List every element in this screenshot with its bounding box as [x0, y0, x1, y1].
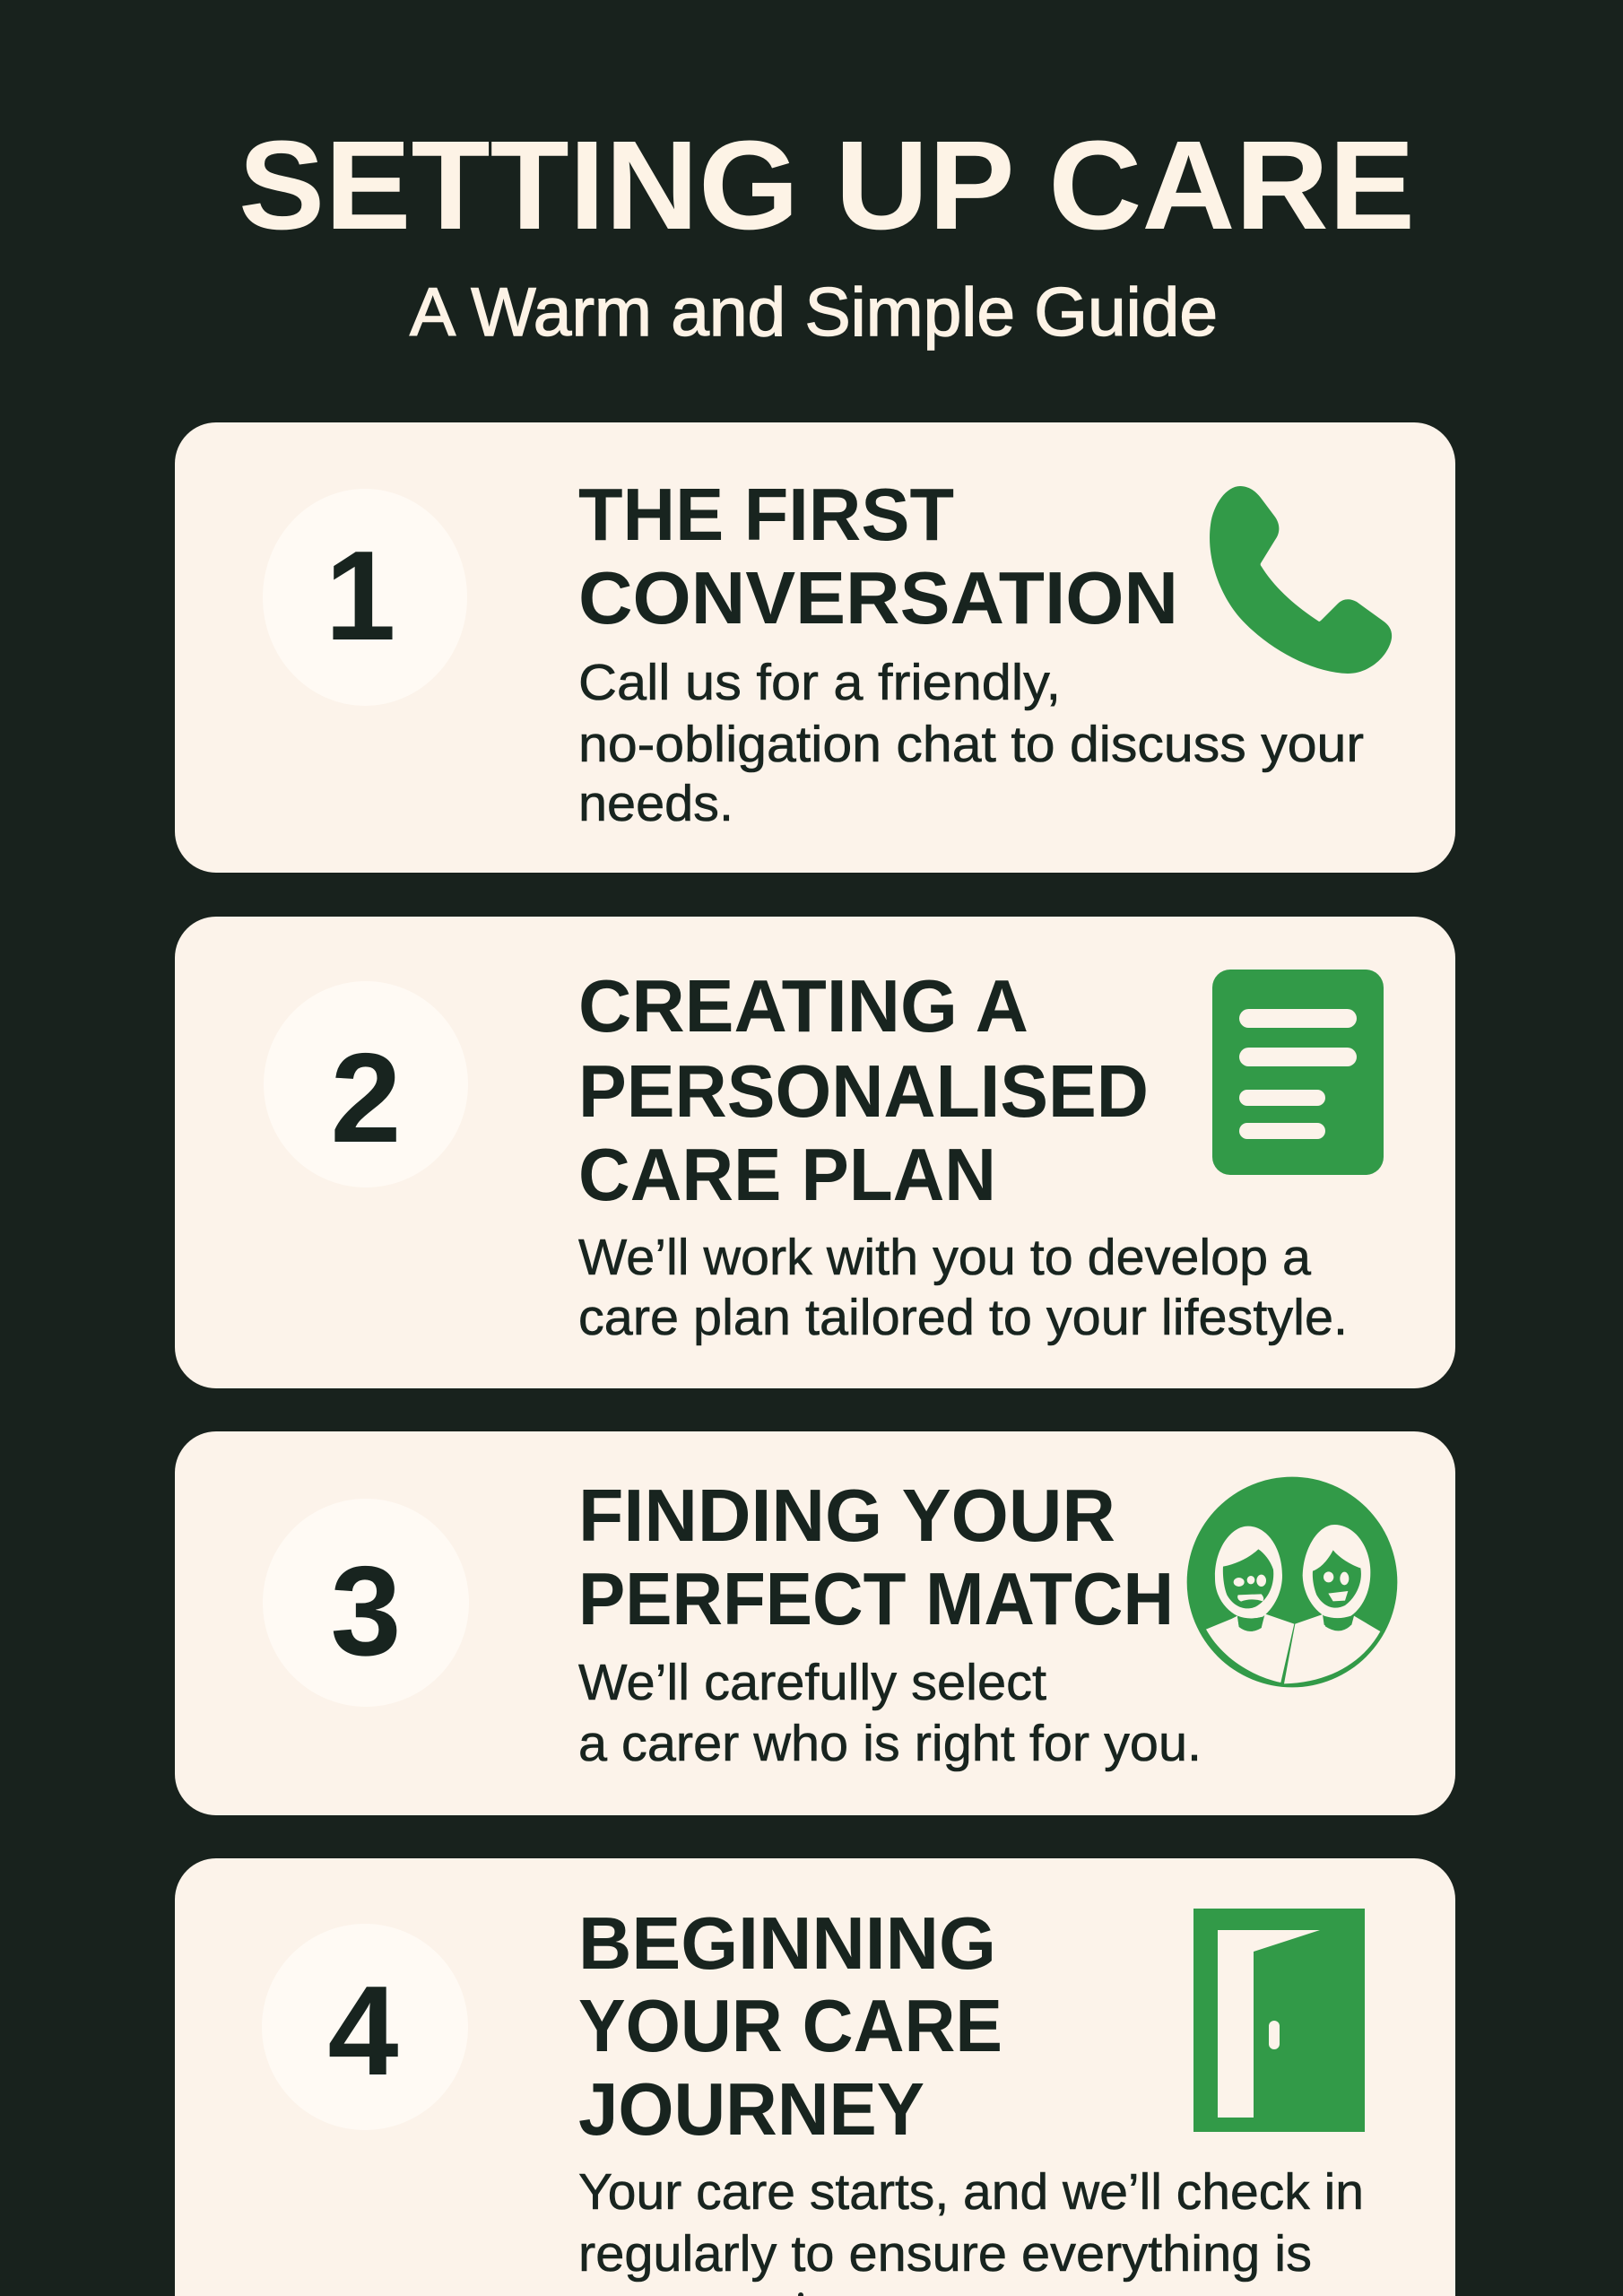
heading: finding your perfect match	[578, 1474, 1174, 1640]
number badge 2	[264, 981, 468, 1187]
body text step 3: a carer who is right for you.	[578, 1715, 1202, 1772]
body text step 4: Your care starts, and we’ll check in	[578, 2163, 1364, 2221]
body text step 1: needs.	[578, 775, 733, 832]
heading: beginning your care journey: YOUR CARE	[578, 1984, 1002, 2067]
panel: step 2	[175, 917, 1455, 1388]
heading: finding your perfect match: FINDING YOUR	[578, 1474, 1115, 1557]
number badge 2: 2	[331, 1027, 401, 1170]
body text step 4	[578, 2163, 1364, 2296]
subtitle: A Warm and Simple Guide	[410, 274, 1218, 351]
body text step 1: Call us for a friendly,	[578, 654, 1061, 711]
number badge 1	[263, 489, 467, 706]
body text step 1	[578, 654, 1364, 832]
panel: step 4	[175, 1858, 1455, 2296]
body text step 2	[578, 1229, 1348, 1346]
heading: the first conversation	[578, 473, 1178, 639]
panel: step 3	[175, 1431, 1455, 1815]
panel: step 1	[175, 422, 1455, 873]
heading: creating a personalised care plan: CREATING A	[578, 964, 1028, 1048]
body text step 2: We’ll work with you to develop a	[578, 1229, 1311, 1286]
body text step 3: We’ll carefully select	[578, 1654, 1046, 1711]
icon: document	[1212, 970, 1384, 1175]
body text step 4: regularly to ensure everything is	[578, 2225, 1312, 2283]
heading: beginning your care journey: JOURNEY	[578, 2067, 924, 2151]
heading: beginning your care journey	[578, 1901, 1002, 2151]
heading: finding your perfect match: PERFECT MATCH	[578, 1557, 1174, 1640]
number badge 3: 3	[331, 1540, 401, 1683]
icon: two people	[1187, 1477, 1397, 1687]
heading: creating a personalised care plan	[578, 964, 1149, 1216]
heading: beginning your care journey: BEGINNING	[578, 1901, 996, 1985]
number badge 1: 1	[325, 525, 395, 667]
body text step 3	[578, 1654, 1202, 1772]
body text step 1: no-obligation chat to discuss your	[578, 716, 1364, 773]
icon: open door	[1193, 1909, 1365, 2132]
heading: the first conversation: CONVERSATION	[578, 556, 1178, 639]
icon: phone	[1210, 486, 1392, 674]
heading: creating a personalised care plan: CARE PLAN	[578, 1133, 996, 1216]
heading: creating a personalised care plan: PERSONALISED	[578, 1049, 1149, 1133]
title: SETTING UP CARE	[239, 114, 1415, 256]
heading: the first conversation: THE FIRST	[578, 473, 954, 556]
number badge 3	[263, 1499, 469, 1707]
number badge 4	[262, 1924, 468, 2130]
body text step 2: care plan tailored to your lifestyle.	[578, 1289, 1348, 1346]
number badge 4: 4	[328, 1960, 399, 2102]
